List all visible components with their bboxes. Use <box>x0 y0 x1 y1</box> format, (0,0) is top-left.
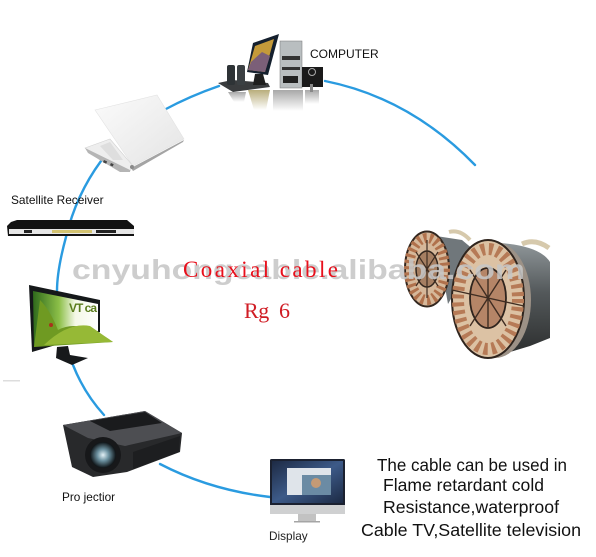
label: display: Display <box>269 529 308 543</box>
front cable end <box>522 242 549 248</box>
icon: projector <box>63 411 182 477</box>
rear reel <box>405 231 474 306</box>
description text: Cable TV,Satellite television <box>361 520 581 540</box>
description text <box>361 455 581 540</box>
icon: satellite receiver <box>7 220 134 236</box>
icon: laptop <box>85 95 184 172</box>
watermark: cnyuhongcable.alibaba.com <box>72 254 525 285</box>
front reel <box>452 240 531 358</box>
icon: display <box>270 459 345 522</box>
reflection <box>228 90 319 111</box>
label: projector: Pro jectior <box>62 490 115 504</box>
description text: The cable can be used in <box>377 455 567 475</box>
description text: Resistance,waterproof <box>383 497 559 517</box>
connection cable arc <box>57 81 475 497</box>
subtitle: Rg 6: Rg 6 <box>244 298 290 323</box>
icon: cable reels <box>405 231 550 358</box>
description text: Flame retardant cold <box>383 475 544 495</box>
front drum <box>500 243 550 352</box>
icon: monitor <box>29 285 113 365</box>
icon: monitor: VT ca <box>69 301 97 315</box>
label: satellite receiver: Satellite Receiver <box>11 193 104 207</box>
label: computer: COMPUTER <box>310 47 379 61</box>
icon: computer <box>218 34 323 111</box>
tick mark <box>3 380 20 382</box>
title: coaxial cable: Coaxial cable <box>183 257 338 282</box>
